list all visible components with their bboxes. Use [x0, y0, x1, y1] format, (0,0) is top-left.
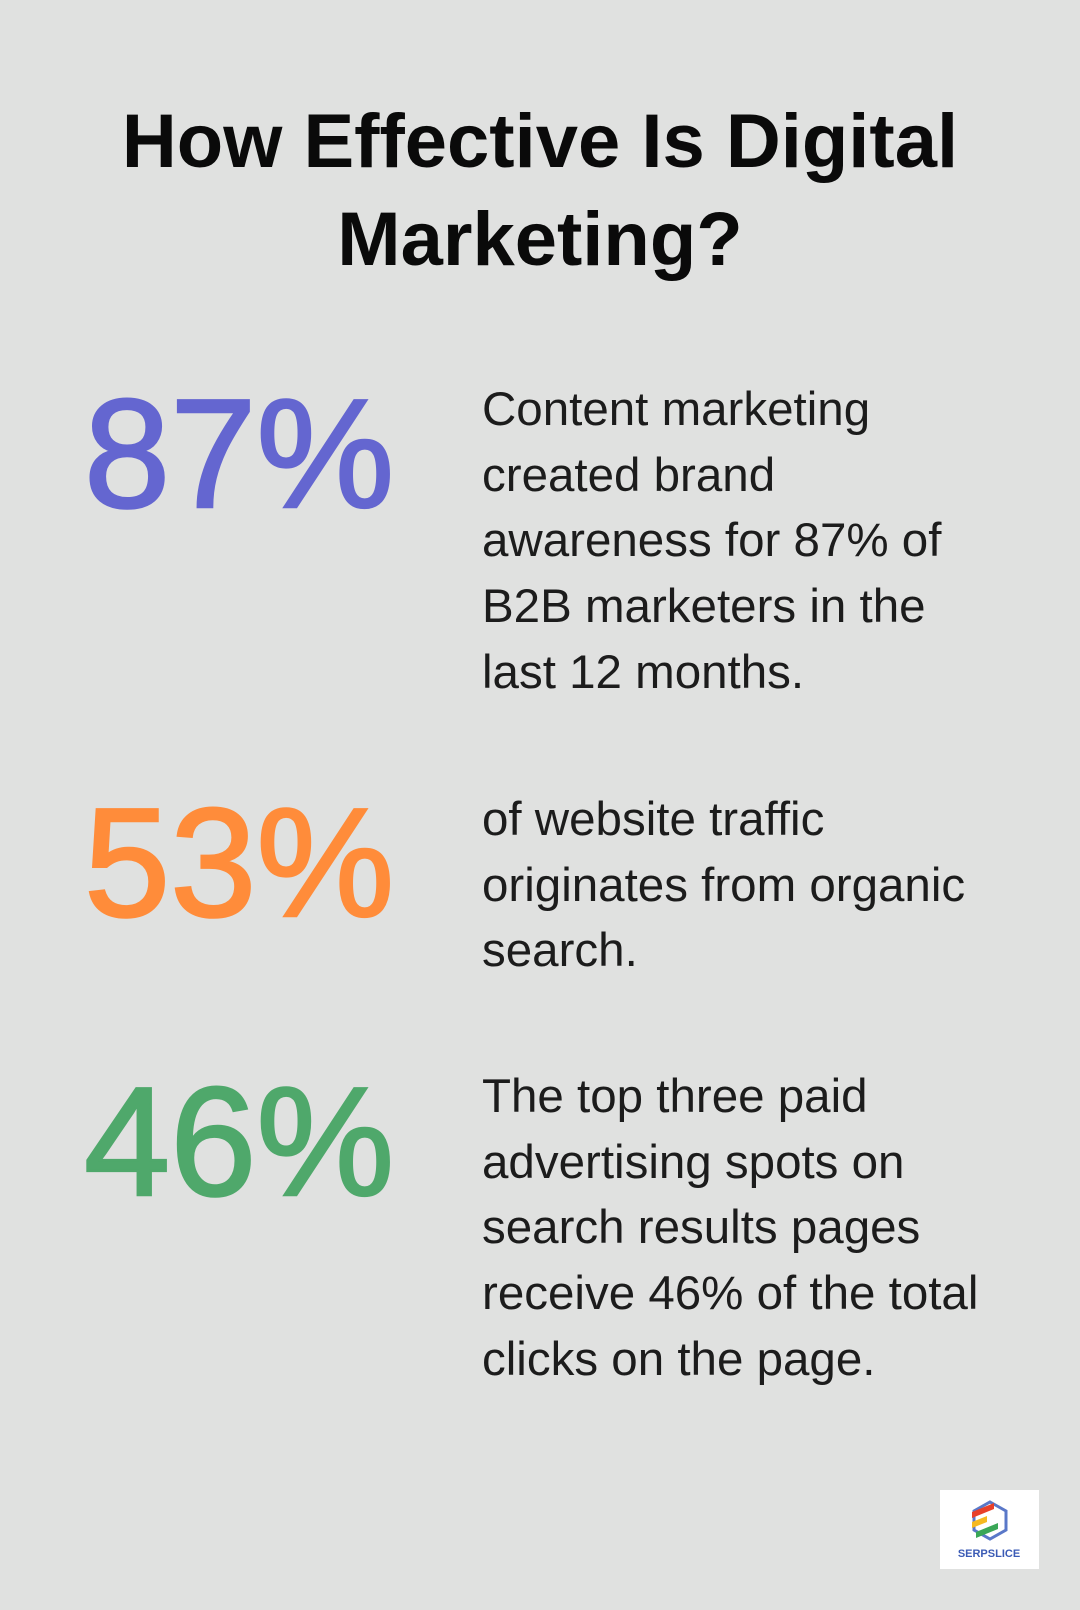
stat 2 text: search.: [482, 924, 638, 977]
icon: logo hexagon: SERPSLICE: [958, 1548, 1020, 1560]
stat 1 text: [482, 383, 942, 699]
title: [122, 99, 958, 282]
stat 1 number: 87%: [84, 367, 394, 540]
stat 3 text: The top three paid: [482, 1070, 868, 1123]
stat 1 text: Content marketing: [482, 383, 870, 436]
stat 2 text: [482, 793, 965, 977]
stat 1 text: B2B marketers in the: [482, 580, 926, 633]
stat 3 text: search results pages: [482, 1201, 920, 1254]
icon: logo hexagon: [958, 1500, 1020, 1560]
stat 3 text: clicks on the page.: [482, 1333, 875, 1386]
stat 3 text: advertising spots on: [482, 1136, 904, 1189]
stat 2 text: of website traffic: [482, 793, 824, 846]
stat 2 text: originates from organic: [482, 859, 965, 912]
stat 1 text: awareness for 87% of: [482, 514, 941, 567]
stat 1 text: last 12 months.: [482, 646, 804, 699]
logo: [940, 1490, 1039, 1569]
title: How Effective Is Digital: [122, 99, 958, 184]
stat 2 number: 53%: [84, 776, 394, 949]
stat 3 number: 46%: [84, 1055, 394, 1228]
stat 3 text: [482, 1070, 978, 1386]
stat 1 text: created brand: [482, 449, 775, 502]
title: Marketing?: [337, 197, 743, 282]
stat 3 text: receive 46% of the total: [482, 1267, 978, 1320]
